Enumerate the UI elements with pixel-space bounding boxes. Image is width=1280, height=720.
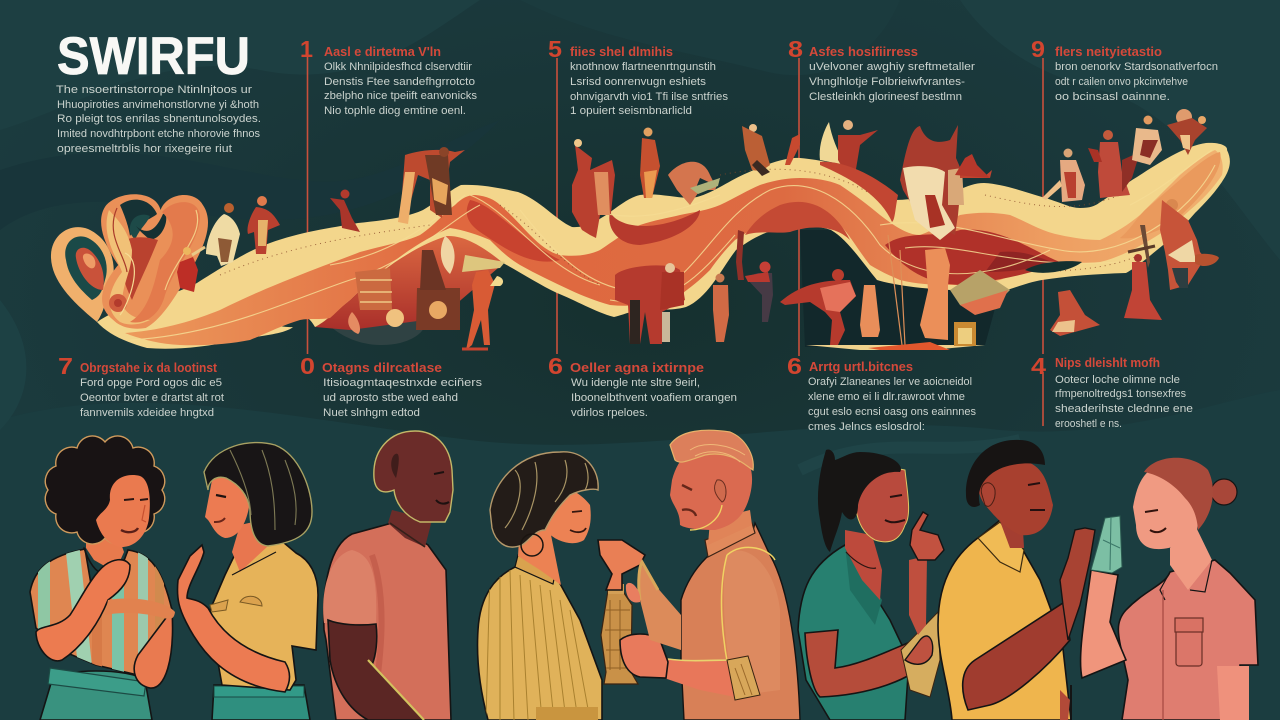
figure: small arm raised	[785, 134, 800, 165]
flowing ribbon	[51, 143, 1230, 349]
person 6: woman ponytail teal shirt	[798, 449, 944, 720]
step 1	[300, 36, 477, 117]
figure: dark red panel figure	[1122, 152, 1140, 192]
figure: pale robed walker	[206, 203, 240, 266]
step 8: uVelvoner awghiy sreftmetaller	[809, 61, 975, 73]
intro text: Imited novdhtrpbont etche nhorovie fhnos	[57, 128, 260, 140]
step 6 left: vdirlos rpeloes.	[571, 407, 648, 419]
step 6 left: Wu idengle nte sltre 9eirl,	[571, 377, 700, 389]
figure: red head reaching left	[736, 230, 773, 322]
step 8: Clestleinkh glorineesf bestlmn	[809, 91, 962, 103]
intro text: Hhuopiroties anvimehonstlorvne yi &hoth	[57, 99, 259, 111]
person 8: woman bun pink shirt	[1081, 458, 1258, 720]
person 7: man yellow shirt	[938, 440, 1095, 720]
figure: robed monk	[1042, 148, 1085, 202]
timeline connector lines	[308, 56, 1043, 426]
step 4	[1031, 353, 1193, 430]
figure: arm drawing right	[955, 154, 990, 178]
figure: dark red walker	[330, 190, 360, 232]
figure: long red dress	[1088, 130, 1130, 198]
step 4: rfmpenoltredgs1 tonsexfres	[1055, 388, 1186, 400]
figure: top right dancer	[1167, 109, 1207, 155]
title: SWIRFU	[57, 27, 250, 86]
person 4: woman yellow ribbed shirt	[477, 452, 602, 720]
left spiral	[51, 227, 114, 322]
step 6 left: Oeller agna ixtirnpe	[570, 360, 704, 375]
machine under arch	[348, 236, 505, 334]
step 7: Obrgstahe ix da lootinst	[80, 360, 218, 375]
step 1: Olkk Nhnilpidesfhcd clservdtiir	[324, 61, 472, 73]
figure: standing red figure under arch	[462, 261, 503, 350]
step 5: knothnow flartneenrtngunstih	[570, 61, 716, 73]
ribbon main body	[97, 143, 1230, 349]
step 0: Otagns dilrcatlase	[322, 360, 442, 375]
step 9: 9	[1031, 36, 1045, 62]
figure: red and cream walker	[247, 196, 280, 254]
step 7: Ford opge Pord ogos dic e5	[80, 377, 222, 389]
person 3: bald man salmon tee	[323, 431, 453, 720]
arch interior	[315, 233, 505, 330]
people row	[30, 430, 1258, 720]
intro text: The nsoertinstorrope Ntinlnjtoos ur	[56, 84, 252, 96]
step 6 left	[548, 353, 737, 419]
figure: group under ribbon	[615, 263, 685, 344]
step 5: 1 opuiert seismbnarlicld	[570, 105, 692, 117]
step 8	[788, 36, 975, 103]
intro text: opreesmeltrblis hor rixegeire riut	[57, 143, 233, 155]
object: carved bottle	[601, 584, 638, 684]
dotted flow ticks	[220, 169, 1140, 285]
step 6 left: 6	[548, 353, 563, 379]
figure: red dancer with drape	[780, 269, 856, 345]
step 1: Denstis Ftee sandefhgrrotcto	[324, 76, 475, 88]
step 0: Itisioagmtaqestnxde eciñers	[323, 377, 482, 389]
step 9: odt r cailen onvo pkcinvtehve	[1055, 76, 1188, 88]
step 9: bron oenorkv Stardsonatlverfocn	[1055, 61, 1218, 73]
step 5	[548, 36, 728, 117]
figure: angular dancer	[742, 124, 770, 176]
figure: boat figure with sail	[820, 120, 898, 222]
step 1: Nio tophle diog emtine oenl.	[324, 105, 466, 117]
step 6 right: Orafyi Zlaneanes ler ve aoicneidol	[808, 376, 972, 388]
step 5: fiies shel dlmihis	[570, 44, 673, 59]
figure: hanging drape with stem	[888, 235, 1010, 345]
lobes of deep red	[609, 210, 700, 245]
step 9: oo bcinsasl oainnne.	[1055, 91, 1170, 103]
figure: patterned figure	[1132, 116, 1162, 165]
step 6 left: Iboonelbthvent voafiem orangen	[571, 392, 737, 404]
step 0: Nuet slnhgm edtod	[323, 407, 420, 419]
figure: orange robe	[860, 285, 880, 337]
step 5: 5	[548, 36, 562, 62]
person 1: curly hair striped shirt	[30, 436, 175, 720]
step 0: 0	[300, 353, 315, 379]
flow lines	[130, 150, 1215, 340]
intro text	[56, 84, 261, 155]
figure: small red dancer	[177, 247, 205, 292]
step 6 right: 6	[787, 353, 802, 379]
figure: dancer pair	[572, 139, 615, 238]
step 7: fannvemils xdeidee hngtxd	[80, 407, 214, 419]
step 9	[1031, 36, 1218, 103]
step 6 right: xlene emo ei li dlr.rawroot vhme	[808, 391, 965, 403]
step 4: sheaderihste clednne ene	[1055, 403, 1193, 415]
shadow stage right	[800, 230, 1000, 347]
orange middle stream	[125, 150, 1223, 345]
step 8: Vhnglhlotje Folbrieiwfvrantes-	[809, 76, 965, 88]
step 1: zbelpho nice tpeiift eanvonicks	[324, 90, 477, 102]
figure: large crouching figure	[398, 147, 465, 224]
step 6 right: Arrtg urtl.bitcnes	[809, 359, 913, 374]
figure: green and pale crouching figure	[668, 162, 720, 205]
person 4 hand	[598, 540, 645, 590]
step 6 right: cgut eslo ecnsi oasg ons eainnnes	[808, 406, 976, 418]
step 4: Ootecr loche olimne ncle	[1055, 374, 1180, 386]
intro text: Ro pleigt tos enrilas sbnentunolsoydes.	[57, 113, 261, 125]
figure: hanging right figure	[1160, 199, 1219, 290]
step 4: 4	[1031, 353, 1046, 379]
heart coil	[101, 194, 208, 329]
step 7	[58, 353, 225, 419]
step 7: 7	[58, 353, 73, 379]
shadow under arch	[310, 300, 440, 345]
step 0: ud aprosto stbe wed eahd	[323, 392, 458, 404]
figure: large central robed figure	[900, 125, 992, 240]
figure: standing woman	[713, 274, 729, 342]
step 8: 8	[788, 36, 803, 62]
figure: robed woman	[640, 128, 660, 198]
step 1: Aasl e dirtetma V'ln	[324, 44, 441, 59]
step 8: Asfes hosifiirress	[809, 44, 918, 59]
step 5: ohnvigarvth vio1 Tfi ilse sntfries	[570, 91, 728, 103]
step 5: Lsrisd oonrenvugn eshiets	[570, 76, 706, 88]
person 5: blond man with moustache	[620, 430, 800, 720]
step 9: flers neityietastio	[1055, 44, 1162, 59]
step 0	[300, 353, 482, 419]
step 7: Oeontor bvter e drartst alt rot	[80, 392, 225, 404]
figure: red long dress below	[1124, 225, 1162, 320]
ribbon hole	[1025, 261, 1082, 273]
step 4: erooshetl e ns.	[1055, 418, 1122, 430]
bottom stage strip with lantern	[806, 322, 985, 350]
step 6 right: cmes Jelncs eslosdrol:	[808, 421, 925, 433]
figure: crouching bottom figure	[1050, 290, 1100, 336]
step 6 right	[787, 353, 976, 433]
figures on the ribbon	[177, 109, 1219, 350]
person 2: bob hair yellow shirt	[177, 443, 318, 720]
step 1: 1	[300, 36, 313, 62]
step 4: Nips dleishlt mofh	[1055, 355, 1160, 370]
